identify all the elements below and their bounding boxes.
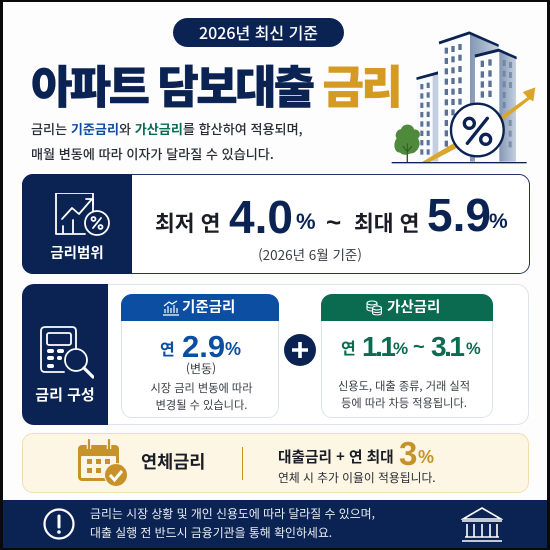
minimum value: 4.0 [229,191,293,243]
note: 연체 시 추가 이율이 적용됩니다. [278,469,436,486]
description [150,380,253,412]
panel: rate range [22,174,530,274]
variable note: (변동) [186,360,216,377]
side tab [22,284,108,425]
prefix: 연 [341,335,356,359]
card frame [121,294,279,418]
description: 신용도, 대출 종류, 거래 실적 [338,378,470,394]
disclaimer [90,505,375,540]
description [338,378,470,410]
maximum percent: % [489,210,508,233]
high percent: % [466,340,481,358]
intro text [31,119,303,162]
low number: 1.1 [362,331,393,362]
card header [121,294,279,321]
panel frame [22,284,529,425]
card header [321,294,493,321]
rate value [341,331,481,362]
label: 금리범위 [50,242,104,263]
formula text: 대출금리 + 연 최대 [278,446,394,467]
icon: bar chart [163,300,179,316]
tilde: ~ [413,336,425,358]
panel: rate composition [22,284,529,425]
title: 아파트 담보대출 금리 [31,51,400,116]
maximum label: 최대 연 [354,207,419,238]
panel: overdue rate [22,433,529,493]
high number: 3.1 [431,331,462,362]
description: 시장 금리 변동에 따라 [150,380,253,396]
label: 연체금리 [141,449,205,474]
icon: coins [366,300,382,316]
card: base rate [121,294,279,418]
intro text: 금리는 기준금리와 가산금리를 합산하여 적용되며, [31,119,303,138]
card title: 기준금리 [182,296,235,317]
minimum label: 최저 연 [155,207,220,238]
pill: reference date: 2026년 최신 기준 [199,20,318,44]
percent: % [418,447,434,467]
footer bar [0,500,550,548]
tilde: ~ [326,207,341,237]
number: 3 [399,435,417,472]
disclaimer: 금리는 시장 상황 및 개인 신용도에 따라 달라질 수 있으며, [90,505,375,522]
pill: reference date [173,18,344,47]
date note: (2026년 6월 기준) [258,244,362,264]
icon: plus [284,334,316,366]
card title: 가산금리 [387,296,440,317]
description: 등에 따라 차등 적용됩니다. [341,394,467,410]
side tab [22,174,132,274]
description: 변경될 수 있습니다. [156,396,247,412]
card: added rate [321,294,493,418]
divider [242,447,243,480]
icon: bank [461,507,503,542]
number: 2.9 [182,329,225,364]
icon: calculator with magnifier [40,326,94,379]
minimum percent: % [296,209,316,234]
card frame [321,294,493,418]
panel frame [22,174,530,274]
rate values [155,189,508,243]
rate value [160,329,241,364]
icon: chart with percent [55,193,110,236]
icon: calendar with check [78,439,127,486]
icon: exclamation [43,508,75,540]
intro text: 매월 변동에 따라 이자가 달라질 수 있습니다. [31,144,274,162]
disclaimer: 대출 실행 전 반드시 금융기관을 통해 확인하세요. [90,524,332,540]
percent: % [225,339,241,359]
label: 금리 구성 [35,384,95,405]
maximum value: 5.9 [427,189,491,241]
formula [278,435,434,472]
prefix: 연 [160,336,175,360]
illustration: apartment buildings with rising arrow and percent [392,31,536,164]
low percent: % [393,339,408,358]
